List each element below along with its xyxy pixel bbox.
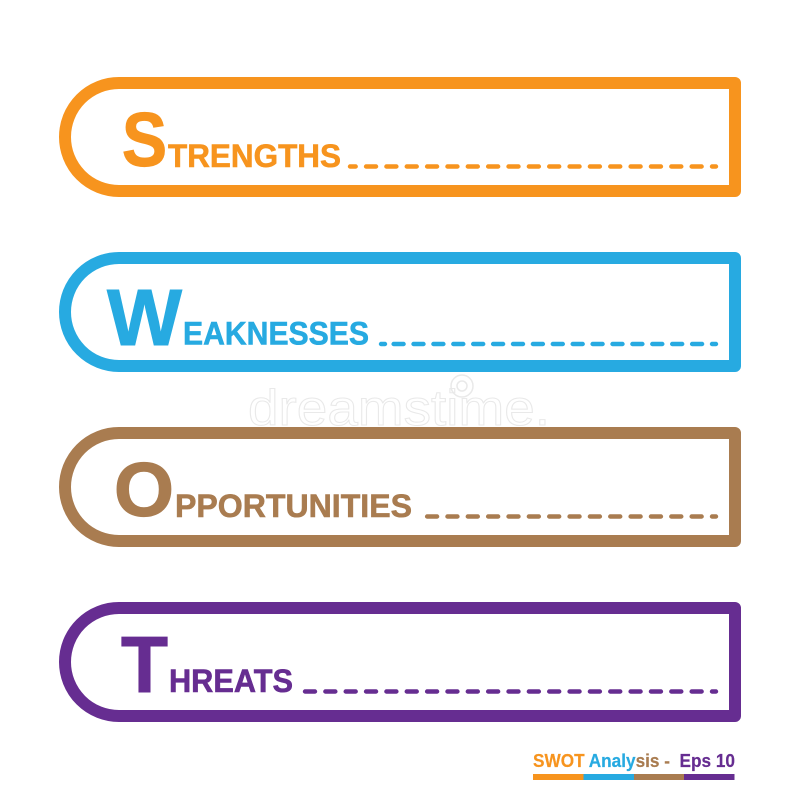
panel: opportunities [65,433,735,541]
heading: opportunities: O [114,448,174,533]
threats outline [65,608,735,716]
heading: strengths: S [122,98,167,183]
heading: weaknesses: EAKNESSES [183,316,369,352]
heading: strengths [122,98,341,183]
heading: weaknesses: W [107,273,182,362]
dashed writing line: strengths [350,164,716,169]
panel: weaknesses [65,258,735,366]
panel: strengths [65,83,735,191]
strengths outline [65,83,735,191]
heading: threats [121,620,293,709]
heading: threats: HREATS [169,663,293,699]
heading: weaknesses [107,273,369,362]
heading: strengths: TRENGTHS [168,138,341,174]
dashed writing line: threats [303,689,716,694]
opportunities outline [65,433,735,541]
weaknesses outline [65,258,735,366]
four-colour bar [533,774,734,780]
watermark: dreamstime. [248,380,550,436]
dashed writing line: weaknesses [381,342,716,346]
caption text: SWOT Analysis - Eps 10 [533,751,735,771]
footer caption [533,751,735,780]
heading: opportunities: PPORTUNITIES [175,488,412,524]
panel: threats [65,608,735,716]
heading: opportunities [114,448,412,533]
dashed writing line: opportunities [424,514,716,519]
heading: threats: T [121,620,168,709]
